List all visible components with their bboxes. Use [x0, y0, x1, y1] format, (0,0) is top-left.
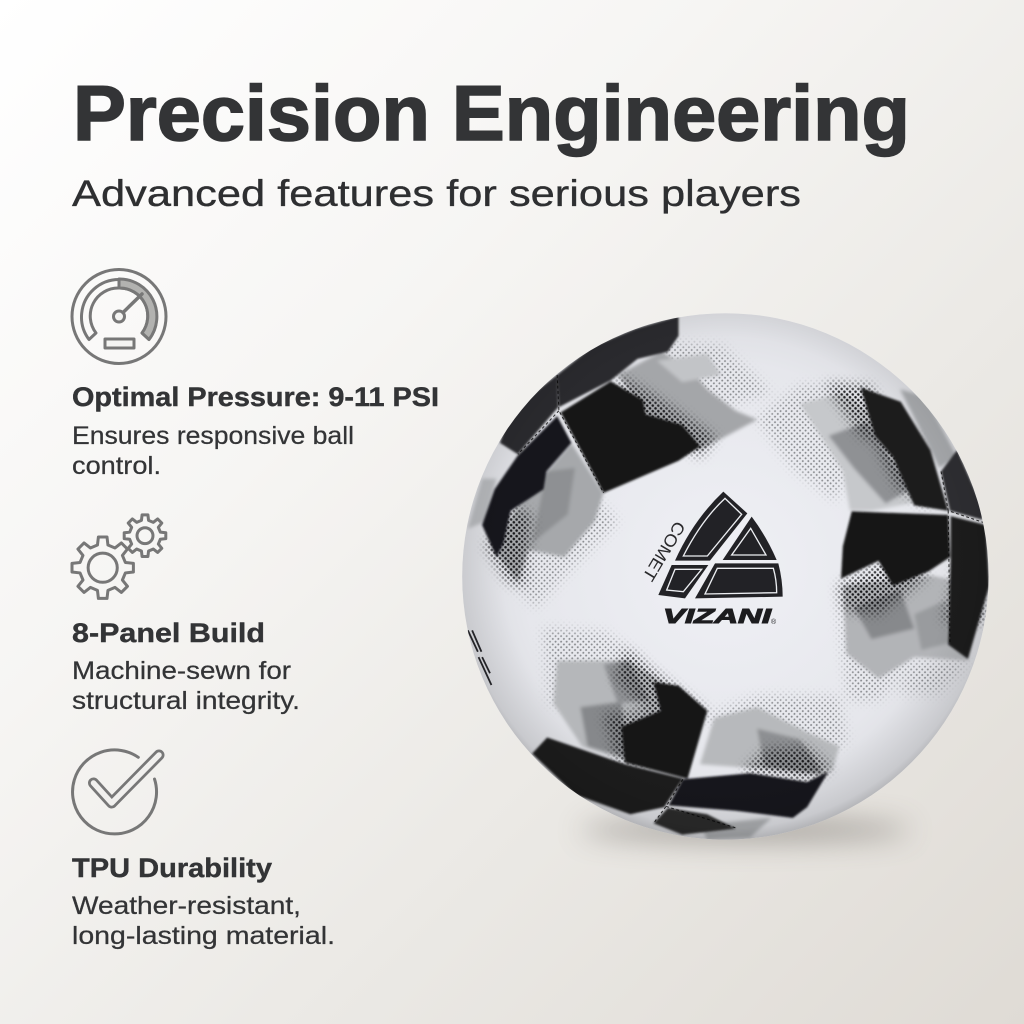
- icon: pressure gauge: [72, 270, 166, 364]
- text: 8-panel description: [72, 657, 300, 715]
- text: optimal pressure description: [72, 422, 354, 480]
- text: optimal pressure description: control.: [72, 452, 161, 480]
- printed side marks: [468, 630, 491, 685]
- logo wordmark: VIZANI: [663, 606, 772, 628]
- heading: optimal pressure: Optimal Pressure: 9-11 PSI: [72, 382, 439, 412]
- text: tpu description: [72, 892, 335, 950]
- model name: COMET: [639, 518, 689, 584]
- seams: [518, 375, 986, 828]
- subtitle: Advanced features for serious players: [72, 173, 801, 214]
- gray mottled panels: [468, 352, 982, 839]
- soccer ball: [462, 313, 989, 840]
- title: Precision Engineering: [73, 69, 910, 157]
- ball shadow: [580, 819, 910, 841]
- registered mark: ®: [771, 618, 777, 626]
- text: 8-panel description: structural integrity.: [72, 687, 300, 715]
- halftone gray stipple: [510, 338, 968, 751]
- heading: tpu durability: TPU Durability: [72, 853, 272, 883]
- ball edge shading: [462, 313, 989, 840]
- text: tpu description: Weather-resistant,: [72, 892, 301, 920]
- icon: check mark in circle: [73, 750, 159, 834]
- text: optimal pressure description: Ensures responsive ball: [72, 422, 354, 450]
- text: tpu description: long-lasting material.: [72, 922, 335, 950]
- halftone dot transitions: [480, 371, 988, 782]
- dark panels: [482, 316, 989, 835]
- heading: 8-panel build: 8-Panel Build: [72, 618, 265, 648]
- brand logo: [658, 492, 783, 598]
- icon: gears: [72, 515, 166, 598]
- text: 8-panel description: Machine-sewn for: [72, 657, 291, 685]
